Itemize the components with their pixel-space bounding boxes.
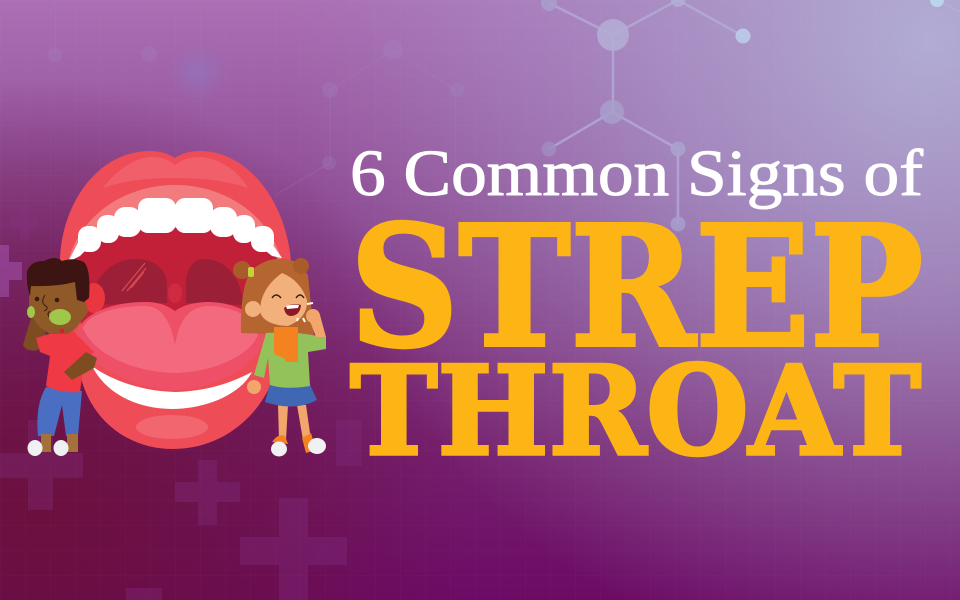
girl sweater xyxy=(254,332,326,388)
boy inflamed neck xyxy=(60,328,64,334)
girl legs xyxy=(278,405,311,440)
gums xyxy=(68,185,282,262)
girl character xyxy=(233,258,326,456)
boy shirt xyxy=(36,330,94,392)
upper lip highlight xyxy=(103,157,248,188)
girl hair back xyxy=(241,259,314,335)
tonsil arches xyxy=(83,259,243,313)
title line: 6 Common Signs of xyxy=(350,137,923,210)
boy legs xyxy=(37,387,82,436)
girl eyes and mouth xyxy=(272,295,313,322)
girl socks and shoes xyxy=(271,433,326,456)
background medical crosses xyxy=(0,205,362,600)
girl face xyxy=(260,273,307,326)
girl scarf xyxy=(274,327,298,362)
girl raised arm xyxy=(308,315,326,337)
boy green cheeks xyxy=(27,306,71,325)
girl lower hand xyxy=(247,380,261,394)
molecule top right xyxy=(541,0,960,232)
boy hair xyxy=(27,258,89,302)
tongue highlight xyxy=(83,306,258,373)
girl pigtails xyxy=(233,258,309,279)
boy character xyxy=(23,258,97,456)
boy face xyxy=(29,278,88,334)
faint molecule left xyxy=(48,0,464,195)
boy arm raised xyxy=(23,316,46,350)
heading: THROAT: THROAT xyxy=(350,340,921,484)
lower teeth xyxy=(92,366,252,409)
throat xyxy=(70,228,280,330)
boy facial features xyxy=(35,295,59,318)
boy forearm xyxy=(64,352,97,380)
tongue xyxy=(76,302,264,390)
open mouth illustration xyxy=(60,151,291,449)
lips xyxy=(60,151,291,449)
boy socks and shoes xyxy=(28,434,78,456)
girl skirt xyxy=(265,380,317,407)
molecule glow xyxy=(168,42,228,102)
lower lip highlight xyxy=(136,415,208,439)
upper teeth xyxy=(68,198,282,262)
